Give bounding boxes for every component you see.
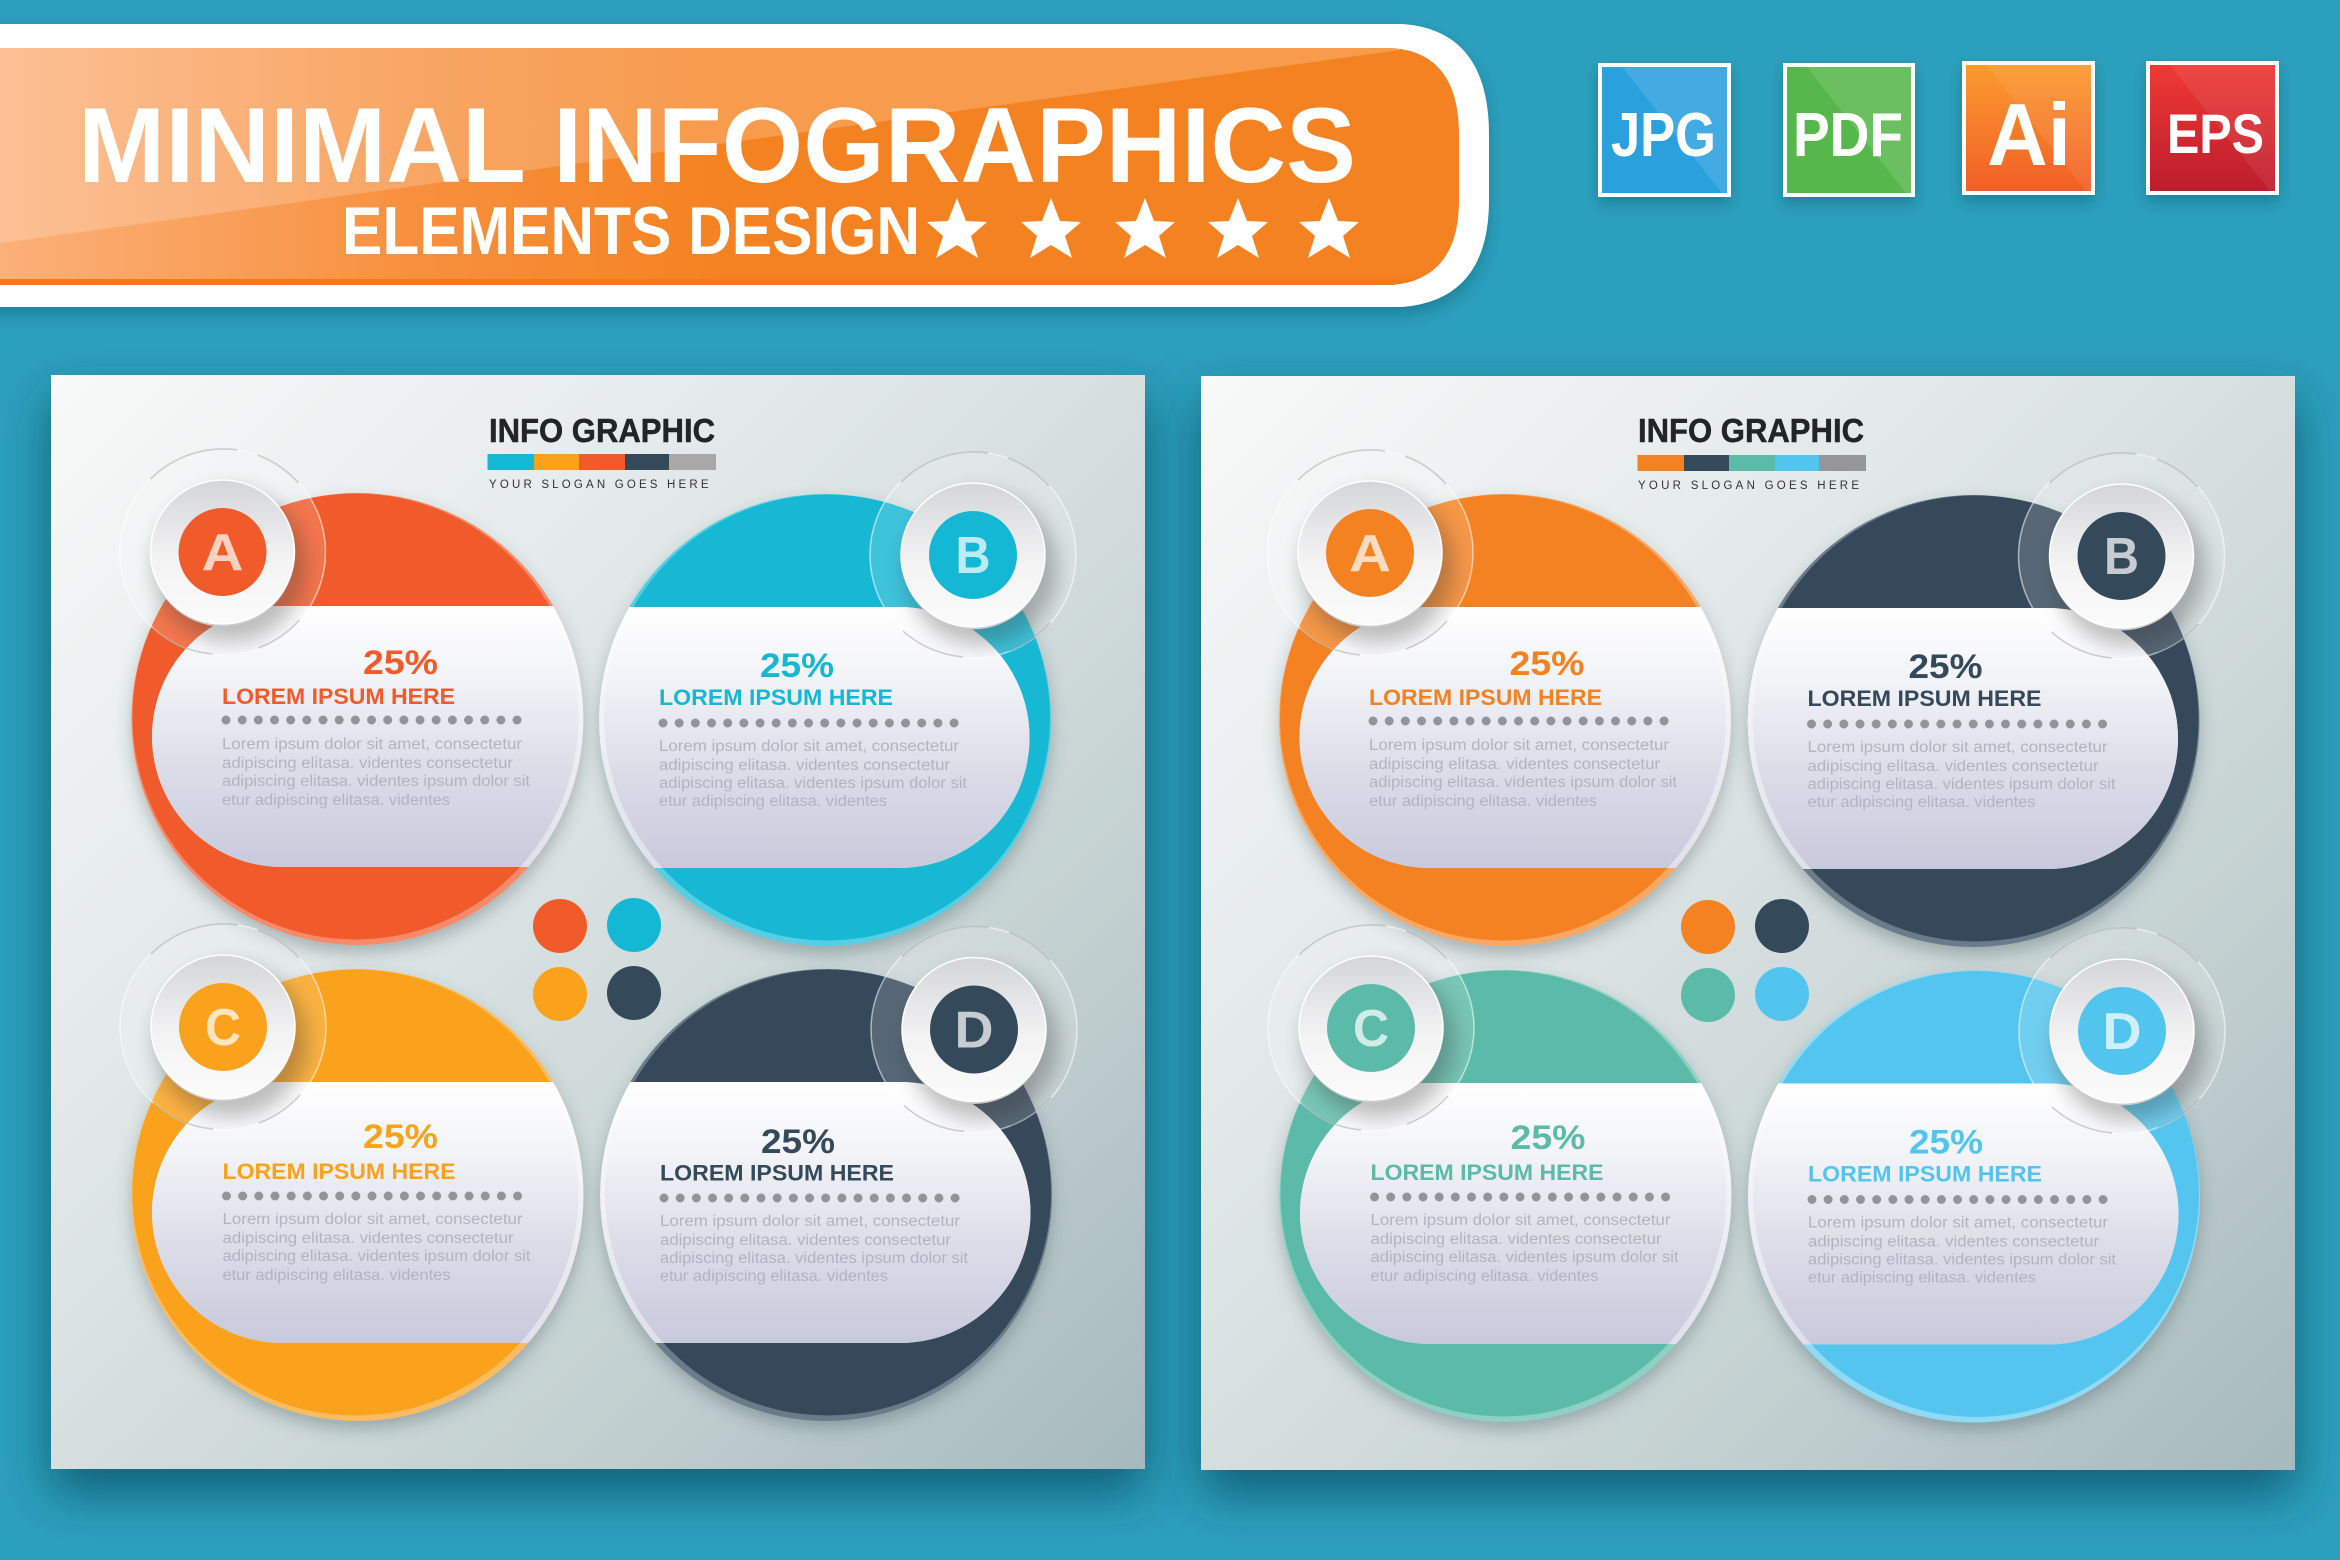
module B bbox=[1734, 453, 2224, 947]
disc bbox=[132, 969, 584, 1421]
panel background bbox=[51, 375, 1145, 1469]
body text: etur adipiscing elitasa. videntes bbox=[660, 1268, 888, 1285]
dotted divider bbox=[1812, 720, 2104, 728]
slogan: YOUR SLOGAN GOES HERE bbox=[489, 479, 709, 491]
badge D bbox=[871, 926, 1077, 1132]
module A bbox=[120, 449, 598, 945]
percentage: 25% bbox=[760, 647, 834, 685]
badge C: C bbox=[205, 999, 241, 1057]
legend dots bbox=[533, 898, 661, 1021]
badge C: C bbox=[1353, 1000, 1389, 1058]
body text: adipiscing elitasa. videntes ipsum dolor sit bbox=[1369, 774, 1678, 791]
dotted divider bbox=[1374, 1192, 1666, 1202]
percentage: 25% bbox=[761, 1123, 835, 1161]
item heading: LOREM IPSUM HERE bbox=[1808, 1162, 2042, 1186]
disc bbox=[600, 969, 1052, 1421]
body text bbox=[659, 738, 968, 810]
percentage: 25% bbox=[363, 1118, 438, 1156]
item heading: LOREM IPSUM HERE bbox=[1369, 685, 1602, 710]
panel: left infographic bbox=[51, 375, 1145, 1469]
module D bbox=[586, 926, 1077, 1421]
badge B bbox=[2018, 453, 2224, 659]
disc bbox=[132, 493, 584, 945]
body text bbox=[222, 1211, 531, 1284]
body text: adipiscing elitasa. videntes ipsum dolor sit bbox=[1370, 1249, 1679, 1266]
body text: etur adipiscing elitasa. videntes bbox=[1808, 794, 2036, 811]
body text: Lorem ipsum dolor sit amet, consectetur bbox=[1808, 1214, 2108, 1232]
body text: adipiscing elitasa. videntes consectetur bbox=[1808, 1234, 2099, 1250]
module C bbox=[120, 924, 598, 1421]
badge A bbox=[120, 449, 326, 655]
panel heading: INFO GRAPHIC bbox=[489, 412, 715, 449]
banner subtitle: ELEMENTS DESIGN bbox=[342, 193, 920, 269]
body text: etur adipiscing elitasa. videntes bbox=[659, 793, 887, 810]
body text: adipiscing elitasa. videntes ipsum dolor sit bbox=[222, 1248, 531, 1265]
body text: adipiscing elitasa. videntes consectetur bbox=[222, 755, 513, 772]
colour bar bbox=[1638, 455, 1866, 471]
item heading: LOREM IPSUM HERE bbox=[660, 1160, 894, 1186]
disc bbox=[1748, 495, 2200, 947]
percentage: 25% bbox=[1510, 1119, 1586, 1157]
disc bbox=[1280, 970, 1732, 1422]
badge A: A bbox=[1349, 525, 1391, 583]
body text: adipiscing elitasa. videntes ipsum dolor sit bbox=[1808, 776, 2116, 793]
body text: adipiscing elitasa. videntes ipsum dolor sit bbox=[659, 775, 968, 792]
body text: Lorem ipsum dolor sit amet, consectetur bbox=[660, 1213, 960, 1230]
icon: PDF bbox=[1783, 63, 1915, 197]
item heading: LOREM IPSUM HERE bbox=[1370, 1160, 1604, 1185]
icon: Ai: Ai bbox=[1987, 85, 2071, 184]
body text: Lorem ipsum dolor sit amet, consectetur bbox=[222, 736, 522, 753]
white pane bbox=[1734, 1084, 2178, 1344]
white pane bbox=[586, 1082, 1030, 1343]
module D bbox=[1734, 928, 2225, 1422]
icon: EPS: EPS bbox=[2167, 102, 2264, 165]
icon: Ai bbox=[1962, 61, 2095, 195]
badge D: D bbox=[2102, 1003, 2142, 1061]
body text bbox=[1369, 737, 1678, 810]
banner white border bbox=[0, 24, 1489, 307]
badge B: B bbox=[2104, 528, 2139, 586]
body text: etur adipiscing elitasa. videntes bbox=[222, 1267, 451, 1284]
item heading: LOREM IPSUM HERE bbox=[1808, 686, 2042, 711]
badge C bbox=[120, 924, 326, 1130]
banner title: MINIMAL INFOGRAPHICS bbox=[78, 85, 1356, 205]
body text: etur adipiscing elitasa. videntes bbox=[1808, 1270, 2036, 1286]
body text: Lorem ipsum dolor sit amet, consectetur bbox=[1369, 737, 1669, 754]
body text: Lorem ipsum dolor sit amet, consectetur bbox=[659, 738, 959, 755]
white pane bbox=[585, 607, 1030, 868]
body text: adipiscing elitasa. videntes consectetur bbox=[1808, 758, 2098, 775]
body text: adipiscing elitasa. videntes consectetur bbox=[222, 1230, 514, 1247]
panel background bbox=[1201, 376, 2295, 1470]
badge D: D bbox=[954, 1002, 994, 1060]
body text bbox=[222, 736, 531, 809]
item heading: LOREM IPSUM HERE bbox=[222, 684, 455, 709]
banner bbox=[0, 24, 1489, 307]
body text: adipiscing elitasa. videntes ipsum dolor sit bbox=[222, 773, 531, 790]
percentage: 25% bbox=[1510, 645, 1584, 683]
badge D bbox=[2019, 928, 2225, 1134]
body text: Lorem ipsum dolor sit amet, consectetur bbox=[1808, 739, 2108, 756]
white pane bbox=[152, 606, 598, 867]
item heading: LOREM IPSUM HERE bbox=[659, 685, 893, 710]
body text bbox=[1808, 1214, 2117, 1286]
body text: adipiscing elitasa. videntes consectetur bbox=[660, 1232, 951, 1249]
panel heading: INFO GRAPHIC bbox=[1638, 412, 1864, 449]
dotted divider bbox=[226, 716, 518, 724]
icon: EPS bbox=[2146, 61, 2279, 195]
module C bbox=[1268, 925, 1746, 1422]
body text: adipiscing elitasa. videntes ipsum dolor sit bbox=[660, 1250, 969, 1267]
body text: adipiscing elitasa. videntes consectetur bbox=[1369, 756, 1660, 773]
module B bbox=[585, 452, 1076, 946]
percentage: 25% bbox=[363, 644, 438, 682]
badge B bbox=[870, 452, 1076, 658]
five stars bbox=[927, 198, 1359, 258]
icon: JPG bbox=[1598, 63, 1731, 197]
disc bbox=[1748, 970, 2200, 1422]
disc bbox=[1279, 494, 1731, 946]
legend dots bbox=[1681, 899, 1809, 1022]
dotted divider bbox=[1812, 1195, 2104, 1204]
body text: etur adipiscing elitasa. videntes bbox=[1370, 1268, 1599, 1285]
body text: etur adipiscing elitasa. videntes bbox=[222, 792, 450, 809]
body text bbox=[1370, 1212, 1679, 1285]
dotted divider bbox=[664, 1194, 956, 1202]
disc bbox=[599, 494, 1051, 946]
dotted divider bbox=[663, 718, 955, 728]
body text: adipiscing elitasa. videntes consectetur bbox=[1370, 1231, 1662, 1248]
item heading: LOREM IPSUM HERE bbox=[222, 1159, 456, 1184]
body text: adipiscing elitasa. videntes ipsum dolor sit bbox=[1808, 1252, 2117, 1268]
panel: right infographic bbox=[1201, 376, 2295, 1470]
body text: Lorem ipsum dolor sit amet, consectetur bbox=[222, 1211, 522, 1228]
badge B: B bbox=[956, 527, 990, 585]
colour bar bbox=[488, 454, 716, 470]
body text: etur adipiscing elitasa. videntes bbox=[1369, 793, 1597, 810]
dotted divider bbox=[226, 1192, 518, 1200]
white pane bbox=[1300, 607, 1745, 868]
dotted divider bbox=[1373, 716, 1664, 726]
body text bbox=[1808, 739, 2116, 811]
percentage: 25% bbox=[1909, 1124, 1983, 1162]
white pane bbox=[152, 1082, 598, 1343]
badge A bbox=[1267, 450, 1473, 656]
icon: PDF: PDF bbox=[1793, 101, 1903, 170]
percentage: 25% bbox=[1908, 648, 1982, 686]
banner orange fill bbox=[0, 40, 1480, 290]
badge C bbox=[1268, 925, 1474, 1131]
body text bbox=[660, 1213, 969, 1285]
slogan: YOUR SLOGAN GOES HERE bbox=[1638, 480, 1859, 492]
module A bbox=[1267, 450, 1745, 946]
white pane bbox=[1300, 1083, 1746, 1344]
icon: JPG: JPG bbox=[1611, 101, 1716, 170]
white pane bbox=[1734, 608, 2178, 869]
body text: adipiscing elitasa. videntes consectetur bbox=[659, 757, 950, 774]
body text: Lorem ipsum dolor sit amet, consectetur bbox=[1370, 1212, 1670, 1229]
badge A: A bbox=[202, 524, 244, 582]
